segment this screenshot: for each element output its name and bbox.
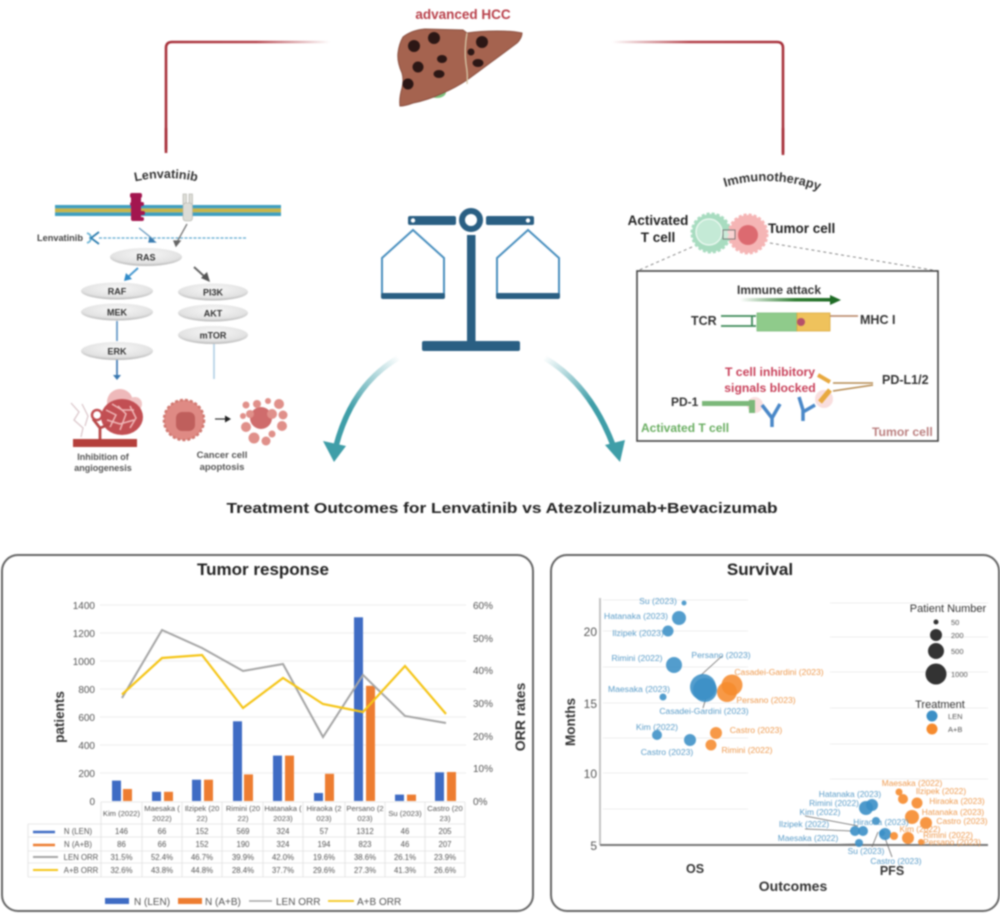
y axis labels: 5 [590, 839, 597, 853]
label: PD-1: PD-1 [671, 395, 699, 409]
axis title: Months: Months [563, 698, 578, 746]
data table [28, 802, 465, 877]
row: N (LEN): N (LEN) [64, 827, 92, 836]
icon: grey receptor [183, 194, 192, 221]
arrow: immune attack [740, 295, 841, 305]
row: N (LEN): 1312 [356, 827, 374, 836]
node: mTOR: mTOR [200, 330, 227, 340]
icon: apoptotic cell fragments [240, 398, 288, 446]
panel: Lenvatinib pathway [36, 168, 288, 474]
axis title: ORR rates: ORR rates [512, 683, 528, 751]
node: RAF: RAF [108, 286, 127, 296]
heading: advanced HCC: advanced HCC [415, 7, 511, 22]
row: A+B ORR: 27.3% [354, 866, 376, 875]
connector lines [700, 656, 892, 857]
icon: tumor cell [729, 215, 767, 253]
PFS LEN labels: Castro (2023) [870, 856, 922, 866]
node: MEK: MEK [107, 308, 128, 318]
OS LEN bubbles [652, 600, 717, 746]
icon: contact detail square [723, 230, 735, 239]
node: AKT: AKT [204, 308, 223, 318]
right axis labels: 40% [473, 666, 493, 677]
row: N (LEN): 57 [320, 827, 328, 836]
right axis labels: 30% [473, 699, 493, 710]
OS A+B labels [721, 667, 824, 755]
panel: Survival [551, 555, 999, 911]
row: N (A+B): 86 [117, 840, 126, 849]
row: N (A+B) [33, 840, 452, 849]
table header: 22) [238, 814, 249, 823]
left axis labels: 800 [78, 685, 95, 696]
row: A+B ORR: A+B ORR [64, 866, 99, 875]
chart: combined bars and ORR lines [52, 601, 528, 808]
left axis labels: 0 [89, 797, 95, 808]
label: T cell inhibitory signals blocked [724, 365, 816, 395]
icon: PD-L1 ligands [815, 375, 873, 408]
row: N (LEN): 66 [158, 827, 166, 836]
OS LEN labels: Maesaka (2023) [608, 684, 670, 694]
table header: 23) [440, 814, 451, 823]
label: PD-L1/2: PD-L1/2 [882, 373, 929, 387]
icon: red receptor [130, 193, 145, 221]
y axis labels: 15 [584, 697, 597, 711]
table header: 22) [197, 814, 208, 823]
node: AKT [178, 304, 248, 322]
cell membrane [55, 205, 281, 216]
x labels [686, 862, 904, 878]
row: LEN ORR: 19.6% [313, 853, 335, 862]
label: TCR: TCR [691, 314, 717, 328]
legend: treatment: A+B [948, 725, 962, 734]
PFS A+B labels: Rimini (2022) [923, 830, 973, 840]
PFS LEN labels: Rimini (2022) [809, 798, 859, 808]
node: mTOR [178, 326, 248, 344]
PFS A+B labels: Castro (2023) [936, 816, 988, 826]
row: LEN ORR: 46.7% [191, 853, 213, 862]
label: immune attack: Immune attack [737, 283, 821, 297]
row: LEN ORR: 38.6% [354, 853, 376, 862]
table header: Rimini (20 [226, 804, 260, 813]
row: LEN ORR [33, 853, 456, 862]
row: A+B ORR: 26.6% [434, 866, 456, 875]
axes [600, 598, 988, 845]
icon: PD-1 receptor [702, 397, 763, 413]
chart legend: A+B ORR [357, 897, 401, 908]
icon: antibodies [762, 397, 815, 427]
left axis labels: 1200 [73, 629, 95, 640]
PFS A+B labels: Maesaka (2022) [882, 778, 942, 788]
legend: treatment: Treatment [915, 699, 965, 711]
PFS A+B labels: Hatanaka (2023) [922, 807, 984, 817]
PFS A+B labels: Persano (2023) [923, 837, 981, 847]
table header: Ilzipek (20 [185, 804, 219, 813]
heading: Immunotherapy: Immunotherapy [722, 171, 822, 192]
table header: Maesaka ( [144, 804, 180, 813]
row: N (LEN): 46 [401, 827, 409, 836]
legend: patient number [910, 603, 987, 684]
OS LEN labels: Kim (2022) [636, 722, 678, 732]
node: PI3K: PI3K [203, 288, 224, 298]
y axis labels: 10 [584, 767, 597, 781]
arrows: RAS branches [124, 267, 210, 282]
row: N (A+B): N (A+B) [64, 840, 92, 849]
axis title: patients: patients [52, 691, 67, 743]
label: MHC I: MHC I [860, 313, 895, 327]
table header: Persano (2 [346, 804, 384, 813]
panel: Tumor response [2, 555, 533, 911]
label: Activated T cell [628, 213, 688, 245]
row: N (A+B): 324 [276, 840, 290, 849]
OS A+B bubbles [706, 674, 742, 750]
row: A+B ORR: 32.6% [110, 866, 133, 875]
row: LEN ORR: 26.1% [394, 853, 416, 862]
OS LEN labels: Ilzipek (2023) [612, 628, 664, 638]
label: Activated T cell green: Activated T cell [641, 421, 729, 435]
table header: 2022) [152, 814, 172, 823]
chart legend: N (A+B) [205, 897, 241, 908]
line: A+B ORR [122, 655, 446, 714]
icon: inhibitor scissors [87, 232, 99, 244]
x labels: OS [686, 862, 704, 876]
legend: patient number: Patient Number [910, 603, 987, 615]
table header: Su (2023) [388, 809, 422, 818]
label: T cell inhibitory signals blocked: signals blocked [724, 381, 816, 395]
icon: cancer cell [164, 400, 204, 440]
heading: Survival: Survival [727, 560, 793, 579]
node: RAS: RAS [136, 252, 156, 262]
arrow: teal curved left [323, 358, 398, 462]
OS LEN labels: Rimini (2022) [611, 653, 663, 663]
legend: patient number: 1000 [951, 670, 968, 679]
table header: Hiraoka (2 [306, 804, 342, 813]
OS LEN labels: Su (2023) [639, 596, 677, 606]
OS LEN labels [604, 596, 751, 757]
row: N (A+B): 207 [438, 840, 452, 849]
row: N (LEN): 146 [115, 827, 128, 836]
x labels: PFS [880, 864, 904, 878]
left axis labels: 400 [78, 741, 95, 752]
bars: N (LEN) [112, 617, 444, 801]
chart legend: LEN ORR [276, 897, 320, 908]
y axis labels [584, 625, 597, 853]
node: ERK [81, 342, 153, 360]
chart legend [105, 897, 401, 908]
legend: patient number: 200 [951, 631, 964, 640]
PFS A+B labels [882, 778, 988, 847]
label: inhibition of angiogenesis [74, 452, 132, 473]
label: Lenvatinib inhibitor: Lenvatinib [37, 233, 83, 243]
PFS LEN labels: Hatanaka (2023) [819, 789, 881, 799]
table header: Hatanaka ( [264, 804, 302, 813]
arrow: red bracket to immunotherapy [612, 42, 783, 155]
label: Activated T cell: T cell [641, 230, 675, 245]
icon: angiogenesis vessels [71, 389, 143, 447]
row: LEN ORR: 39.9% [232, 853, 254, 862]
label: Tumor cell in box: Tumor cell [872, 425, 933, 439]
label: T cell inhibitory signals blocked: T cell inhibitory [725, 365, 815, 379]
row: N (A+B): 152 [195, 840, 209, 849]
heading: Lenvatinib: Lenvatinib [133, 168, 198, 182]
left axis labels: 1400 [73, 601, 95, 612]
label: cancer cell apoptosis: apoptosis [200, 462, 244, 473]
arrows: downstream signalling [113, 321, 214, 380]
axis title: Outcomes: Outcomes [759, 878, 827, 894]
panel: immunotherapy [627, 171, 940, 443]
row: A+B ORR: 43.8% [151, 866, 173, 875]
right axis labels: 0% [473, 797, 488, 808]
bars: N (A+B) [123, 686, 456, 801]
legend: treatment [915, 699, 965, 734]
OS LEN labels: Hatanaka (2023) [604, 611, 668, 621]
row: N (LEN): 324 [276, 827, 290, 836]
node: ERK: ERK [107, 346, 127, 356]
table header: 023) [357, 814, 373, 823]
arrow: apoptosis [215, 416, 231, 422]
line: LEN ORR [122, 630, 446, 737]
legend: patient number: 500 [951, 647, 964, 656]
table header: Kim (2022) [103, 809, 141, 818]
row: N (A+B): 66 [158, 840, 166, 849]
OS LEN labels: Persano (2023) [691, 650, 751, 660]
left axis labels [73, 601, 95, 808]
right axis labels: 20% [473, 732, 493, 743]
right axis labels [473, 601, 493, 808]
row: LEN ORR: 23.9% [434, 853, 456, 862]
PFS LEN labels: Maesaka (2022) [778, 833, 838, 843]
row: A+B ORR: 29.6% [313, 866, 335, 875]
left axis labels: 600 [78, 713, 95, 724]
OS A+B labels: Rimini (2022) [721, 745, 773, 755]
OS LEN labels: Casadei-Gardini (2023) [659, 706, 749, 716]
heading: Tumor response: Tumor response [197, 560, 329, 579]
left axis labels: 200 [78, 769, 95, 780]
icon: T cell [692, 214, 730, 252]
icon: liver with tumors [398, 29, 522, 106]
node: MEK [81, 304, 153, 320]
legend: treatment: LEN [948, 712, 963, 721]
row: N (LEN): 569 [236, 827, 250, 836]
row: A+B ORR: 44.8% [191, 866, 213, 875]
PFS A+B labels: Kim (2022) [900, 824, 941, 834]
node: PI3K [178, 284, 248, 300]
PFS LEN labels: Ilzipek (2022) [779, 819, 829, 829]
table header: 2023) [273, 814, 293, 823]
label: inhibition of angiogenesis: Inhibition of [77, 452, 130, 462]
icon: balance scale [381, 211, 560, 351]
arrow: red bracket to Lenvatinib [166, 42, 330, 153]
left axis labels: 1000 [73, 657, 95, 668]
label: Activated T cell: Activated [628, 213, 688, 228]
right axis labels: 60% [473, 601, 493, 612]
arrows: receptors to RAS [139, 224, 187, 246]
row: LEN ORR: 42.0% [272, 853, 294, 862]
row: LEN ORR: 31.5% [110, 853, 133, 862]
label: Tumor cell: Tumor cell [768, 221, 835, 236]
row: A+B ORR [33, 866, 456, 875]
icon: TCR-MHC complex [721, 313, 858, 331]
OS LEN labels: Castro (2023) [641, 747, 693, 757]
y axis labels: 20 [584, 625, 597, 639]
zoom lines [637, 243, 938, 271]
PFS LEN labels [778, 789, 922, 866]
row: A+B ORR: 28.4% [232, 866, 254, 875]
row: N (LEN): 152 [195, 827, 209, 836]
heading: Treatment Outcomes: Treatment Outcomes for Lenvatinib vs Atezolizumab+Bevacizumab [226, 501, 778, 517]
row: N (A+B): 46 [401, 840, 409, 849]
PFS LEN labels: Kim (2022) [800, 807, 841, 817]
PFS LEN labels: Su (2023) [848, 846, 885, 856]
PFS LEN labels: Hiraoka (2023) [853, 817, 909, 827]
label: inhibition of angiogenesis: angiogenesis [74, 463, 132, 473]
right axis labels: 50% [473, 634, 493, 645]
table header: Castro (20 [427, 804, 463, 813]
panel: immune detail box [637, 271, 938, 441]
row: N (A+B): 190 [236, 840, 250, 849]
OS A+B labels: Castro (2023) [730, 725, 782, 735]
PFS A+B labels: Hiraoka (2023) [929, 796, 985, 806]
row: A+B ORR: 41.3% [394, 866, 416, 875]
dashed inhibition line [99, 237, 246, 239]
row: A+B ORR: 37.7% [272, 866, 294, 875]
PFS LEN bubbles [850, 799, 891, 847]
arrow: teal curved right [545, 358, 625, 462]
row: N (A+B): 823 [358, 840, 372, 849]
chart legend: N (LEN) [134, 897, 170, 908]
right axis labels: 10% [473, 764, 493, 775]
label: cancer cell apoptosis: Cancer cell [197, 450, 247, 461]
OS A+B labels: Casadei-Gardini (2023) [734, 667, 824, 677]
row: N (A+B): 194 [317, 840, 331, 849]
table header [103, 804, 463, 823]
row: LEN ORR: LEN ORR [64, 853, 99, 862]
PFS A+B bubbles [890, 788, 932, 845]
PFS A+B labels: Ilzipek (2022) [916, 786, 966, 796]
row: N (LEN): 205 [438, 827, 452, 836]
legend: patient number: 50 [951, 618, 959, 627]
label: cancer cell apoptosis [197, 450, 247, 473]
row: N (LEN) [33, 827, 452, 836]
node: RAF [81, 282, 153, 300]
bubble chart [563, 596, 988, 894]
row: LEN ORR: 52.4% [151, 853, 173, 862]
node: RAS [110, 248, 182, 266]
OS A+B labels: Persano (2023) [736, 695, 796, 705]
table header: 023) [316, 814, 332, 823]
